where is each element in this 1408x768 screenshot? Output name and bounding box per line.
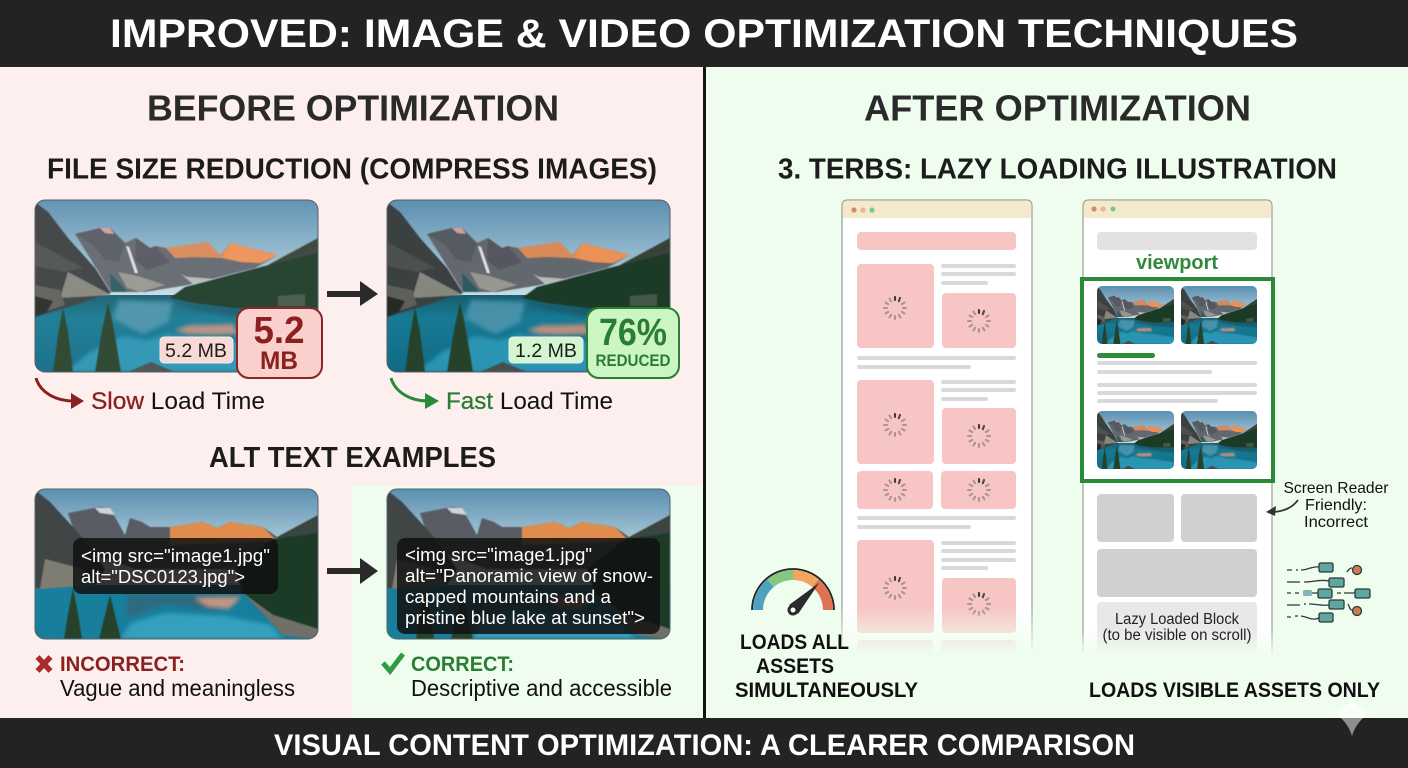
panel: uncompressed image bbox=[35, 200, 318, 372]
panel: incorrect alt text image: alt="DSC0123.jpg"> bbox=[81, 566, 245, 587]
panel: compressed image bbox=[387, 200, 670, 372]
label: loads all assets simultaneously: SIMULTANEOUSLY bbox=[735, 679, 918, 702]
title banner: IMPROVED: IMAGE & VIDEO OPTIMIZATION TECHNIQUES bbox=[110, 12, 1298, 56]
viewport frame bbox=[1082, 279, 1273, 481]
browser window: loads all assets bbox=[838, 200, 1036, 658]
panel: incorrect alt text image: <img src="image1.jpg" bbox=[81, 545, 270, 566]
browser window: loads visible assets: (to be visible on scroll) bbox=[1102, 627, 1252, 644]
label: loads all assets simultaneously: ASSETS bbox=[756, 655, 834, 678]
callout: screen reader friendly: Incorrect bbox=[1304, 514, 1369, 531]
label: loads visible assets only: LOADS VISIBLE ASSETS ONLY bbox=[1089, 679, 1380, 702]
badge: 5.2 MB: 5.2 bbox=[254, 310, 304, 352]
incorrect caption: Vague and meaningless bbox=[60, 675, 295, 701]
browser window: loads visible assets bbox=[1079, 200, 1277, 658]
badge: 5.2 MB bbox=[237, 308, 322, 378]
heading: lazy loading illustration: 3. TERBS: LAZY LOADING ILLUSTRATION bbox=[778, 154, 1337, 186]
panel: correct alt text image bbox=[387, 489, 670, 639]
badge: 5.2 MB: MB bbox=[260, 347, 298, 375]
heading: after optimization: AFTER OPTIMIZATION bbox=[864, 88, 1251, 128]
panel: correct alt text image: pristine blue lake at sunset"> bbox=[405, 607, 645, 628]
fast load time label bbox=[391, 378, 613, 415]
correct caption bbox=[383, 653, 672, 701]
heading: file size reduction: FILE SIZE REDUCTION (COMPRESS IMAGES) bbox=[47, 154, 657, 186]
slow load time label: Slow Load Time bbox=[91, 388, 265, 415]
correct example green background bbox=[352, 486, 703, 718]
left panel background bbox=[0, 67, 703, 718]
arrow: compress bbox=[327, 281, 378, 306]
heading: before optimization: BEFORE OPTIMIZATION bbox=[147, 88, 559, 128]
arrow: alt text improvement bbox=[327, 558, 378, 584]
badge: 76% reduced bbox=[587, 308, 679, 378]
right panel background bbox=[706, 67, 1408, 718]
badge: 76% reduced: REDUCED bbox=[596, 351, 670, 370]
fast load time label: Fast Load Time bbox=[446, 388, 613, 415]
correct caption: CORRECT: bbox=[411, 653, 514, 676]
incorrect caption: INCORRECT: bbox=[60, 653, 185, 676]
panel: incorrect alt text image bbox=[35, 489, 318, 639]
label: loads all assets simultaneously: LOADS ALL bbox=[740, 631, 849, 654]
title banner bbox=[0, 0, 1408, 67]
panel: correct alt text image: alt="Panoramic view of snow- bbox=[405, 565, 653, 586]
slow load time label bbox=[36, 378, 265, 415]
icon: speed gauge bbox=[752, 569, 834, 614]
badge: 76% reduced: 76% bbox=[599, 312, 667, 354]
incorrect caption bbox=[38, 653, 295, 701]
correct caption: Descriptive and accessible bbox=[411, 675, 672, 701]
callout: screen reader friendly: Friendly: bbox=[1305, 497, 1367, 514]
callout: screen reader friendly: Screen Reader bbox=[1284, 480, 1389, 497]
callout: screen reader friendly bbox=[1266, 480, 1389, 531]
center divider bbox=[703, 67, 706, 718]
panel: correct alt text image: <img src="image1.jpg" bbox=[405, 544, 592, 565]
icon: sparkle watermark bbox=[1332, 697, 1372, 736]
footer banner bbox=[0, 718, 1408, 768]
browser window: loads visible assets: viewport bbox=[1136, 252, 1218, 274]
icon: lazy loading node diagram bbox=[1287, 563, 1370, 622]
panel: correct alt text image: capped mountains and a bbox=[405, 586, 612, 607]
panel: uncompressed image: 5.2 MB bbox=[165, 341, 227, 362]
label: loads all assets simultaneously bbox=[735, 631, 918, 702]
browser window: loads visible assets: Lazy Loaded Block bbox=[1115, 611, 1239, 628]
heading: alt text examples: ALT TEXT EXAMPLES bbox=[209, 442, 496, 474]
panel: compressed image: 1.2 MB bbox=[515, 341, 577, 362]
footer banner: VISUAL CONTENT OPTIMIZATION: A CLEARER COMPARISON bbox=[274, 729, 1135, 762]
